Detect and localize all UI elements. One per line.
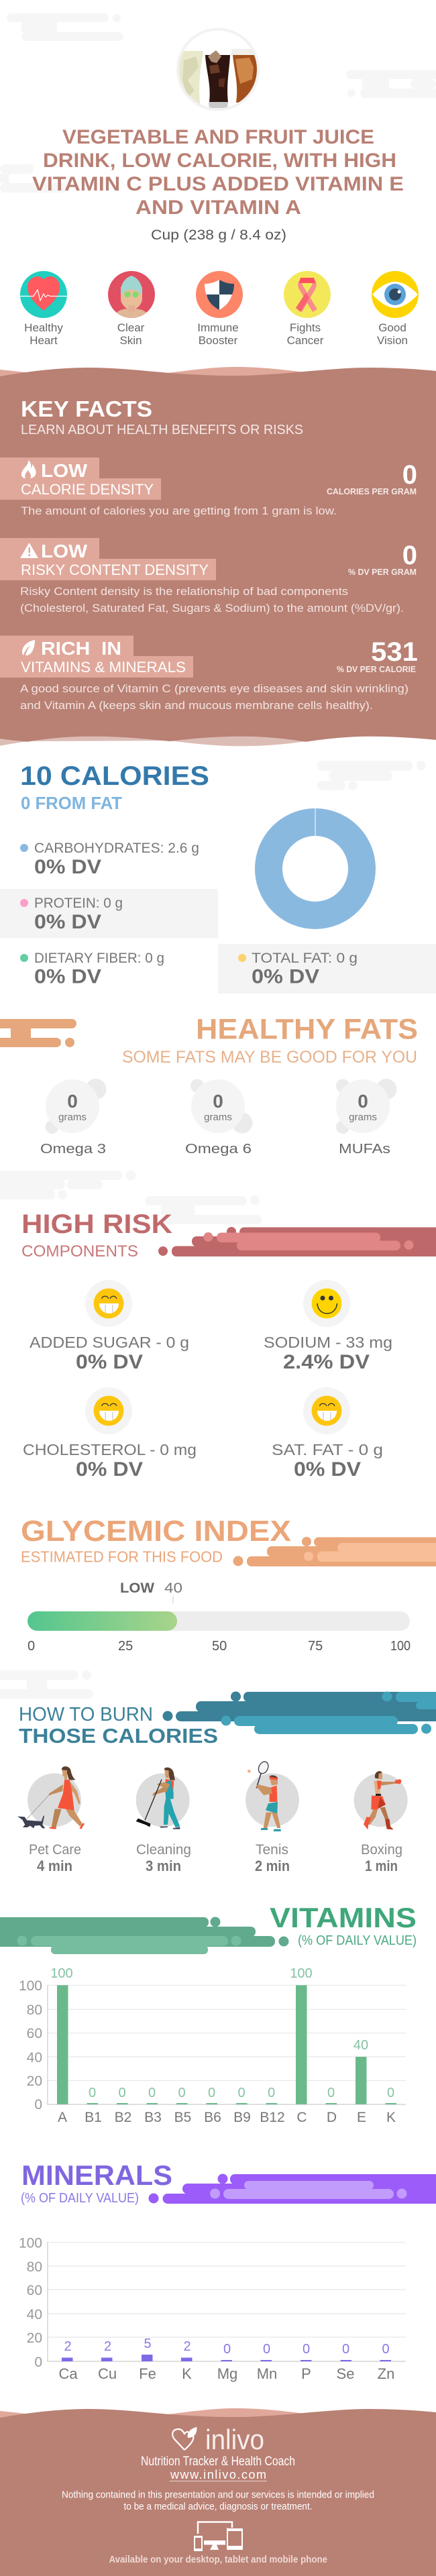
category labels: B9 — [233, 2110, 251, 2125]
website link: www.inlivo.com — [170, 2468, 266, 2481]
label: immune booster: Immune — [197, 321, 239, 334]
y axis labels: 20 — [27, 2330, 42, 2346]
heading: high risk components: HIGH RISK — [21, 1210, 172, 1239]
heading: glycemic index — [21, 1515, 436, 1566]
heading: vitamins: (% OF DAILY VALUE) — [298, 1933, 417, 1948]
icon: flame — [21, 460, 36, 478]
gauge: glycemic index value: 50 — [212, 1639, 227, 1654]
heading: healthy fats — [0, 1013, 418, 1067]
category labels — [58, 2110, 396, 2125]
title: DRINK, LOW CALORIE, WITH HIGH — [43, 150, 396, 172]
y axis labels: 40 — [27, 2050, 42, 2065]
heading: minerals: (% OF DAILY VALUE) — [21, 2191, 139, 2206]
legend item: carbohydrates — [20, 841, 199, 878]
heading: vitamins: VITAMINS — [270, 1902, 417, 1933]
disclaimer: Nothing contained in this presentation and our services is intended or implied — [62, 2489, 374, 2501]
gauge: glycemic index value: 25 — [118, 1639, 133, 1654]
category labels: E — [357, 2110, 366, 2125]
category labels: Cu — [98, 2365, 117, 2382]
value labels: 0 — [89, 2086, 96, 2100]
bar chart: vitamins — [19, 1966, 406, 2125]
label: immune booster: Booster — [199, 334, 238, 347]
gauge: glycemic index value: LOW — [120, 1580, 154, 1596]
panel: omega 6: grams — [204, 1112, 232, 1123]
icon: clear skin — [108, 271, 155, 318]
label: clear skin — [117, 321, 145, 347]
category labels: K — [182, 2365, 192, 2382]
icon: smiling face — [312, 1289, 341, 1318]
y axis labels — [19, 2235, 42, 2370]
icon: grinning face — [312, 1396, 341, 1426]
risk item: saturated fat — [272, 1387, 383, 1481]
value labels: 0 — [263, 2342, 270, 2357]
bar chart: minerals — [19, 2235, 406, 2382]
category labels: Ca — [58, 2365, 78, 2382]
value labels — [50, 1966, 394, 2100]
panel: health benefits — [20, 271, 419, 347]
category labels — [58, 2365, 394, 2382]
y axis labels: 60 — [27, 2026, 42, 2041]
value labels — [64, 2337, 390, 2357]
category labels: B6 — [204, 2110, 221, 2125]
risk item: added sugar — [30, 1280, 189, 1373]
disclaimer: to be a medical advice, diagnosis or treatment. — [123, 2501, 313, 2512]
panel: MUFAs — [336, 1079, 397, 1157]
heading: how to burn those calories: HOW TO BURN — [19, 1704, 153, 1725]
heading: minerals: MINERALS — [21, 2159, 172, 2191]
activity: boxing: 1 min — [365, 1858, 398, 1874]
category labels: B3 — [144, 2110, 162, 2125]
title: AND VITAMIN A — [135, 197, 301, 219]
fact: rich in vitamins and minerals: and Vitamin A (keeps skin and mucous membrane cells healthy). — [20, 699, 373, 712]
value labels: 0 — [178, 2086, 186, 2100]
panel: omega 6: Omega 6 — [185, 1142, 252, 1157]
panel: MUFAs: grams — [349, 1112, 377, 1123]
panel: omega 3: Omega 3 — [40, 1142, 106, 1157]
footer — [0, 2408, 436, 2576]
label: fights cancer: Fights — [290, 321, 321, 334]
fact: rich in vitamins and minerals: RICH IN — [41, 638, 121, 659]
icon: good vision eye — [372, 271, 419, 318]
legend item: protein — [20, 896, 123, 933]
value labels: 0 — [148, 2086, 156, 2100]
value labels: 40 — [353, 2038, 368, 2053]
y axis labels: 0 — [34, 2355, 42, 2370]
legend item: carbohydrates: CARBOHYDRATES: 2.6 g — [34, 841, 199, 856]
legend item: dietary fiber: DIETARY FIBER: 0 g — [34, 951, 164, 966]
panel: omega 3: grams — [58, 1112, 87, 1123]
y axis labels: 40 — [27, 2307, 42, 2322]
label: good vision — [377, 321, 408, 347]
risk item: added sugar: ADDED SUGAR - 0 g — [30, 1334, 189, 1351]
risk item: sodium: 2.4% DV — [283, 1351, 370, 1373]
value labels: 0 — [208, 2086, 215, 2100]
risk item: cholesterol — [23, 1387, 197, 1481]
label: clear skin: Skin — [119, 334, 142, 347]
panel: omega 6 — [185, 1079, 252, 1157]
logo: inlivo: inlivo — [205, 2424, 264, 2455]
fact: low calorie density: LOW — [41, 460, 88, 481]
risk item: cholesterol: 0% DV — [76, 1458, 143, 1481]
value labels: 0 — [237, 2086, 246, 2100]
y axis labels: 100 — [19, 2235, 42, 2251]
heading: key facts: LEARN ABOUT HEALTH BENEFITS OR RISKS — [21, 423, 303, 437]
fact: low calorie density: CALORIES PER GRAM — [327, 486, 417, 496]
tagline: Nutrition Tracker & Health Coach — [141, 2455, 295, 2469]
heading: glycemic index: ESTIMATED FOR THIS FOOD — [21, 1548, 223, 1566]
label: healthy heart — [24, 321, 63, 347]
label: clear skin: Clear — [117, 321, 145, 334]
fact: low risky content density — [0, 538, 417, 614]
category labels: B12 — [260, 2110, 285, 2125]
activity: pet care: 4 min — [37, 1858, 72, 1874]
panel: omega 3 — [40, 1079, 106, 1157]
category labels: C — [296, 2110, 307, 2125]
value labels: 0 — [327, 2086, 335, 2100]
heading: key facts: KEY FACTS — [21, 396, 152, 421]
value labels: 0 — [268, 2086, 275, 2100]
gauge: glycemic index value: 40 — [164, 1580, 182, 1596]
icon: grinning face — [94, 1289, 123, 1318]
value labels: 0 — [342, 2342, 349, 2357]
product photo: three glasses of juice — [176, 30, 258, 110]
label: healthy heart: Heart — [30, 334, 58, 347]
heading: how to burn those calories — [19, 1692, 436, 1748]
value labels: 0 — [382, 2342, 390, 2357]
fact: low calorie density: 0 — [402, 460, 417, 490]
label: good vision: Vision — [377, 334, 408, 347]
y axis labels: 80 — [27, 2002, 42, 2018]
panel: key facts — [0, 367, 436, 746]
value labels: 2 — [64, 2339, 72, 2354]
category labels: Mg — [217, 2365, 237, 2382]
category labels: Mn — [257, 2365, 277, 2382]
panel: MUFAs: MUFAs — [339, 1142, 390, 1157]
logo: inlivo — [172, 2424, 264, 2455]
heading: 10 calories — [20, 761, 209, 813]
legend item: total fat: 0% DV — [252, 966, 319, 987]
heading: high risk components: COMPONENTS — [21, 1242, 138, 1260]
activity: pet care — [17, 1766, 85, 1874]
legend item: protein: 0% DV — [34, 911, 101, 933]
value labels: 0 — [118, 2086, 126, 2100]
panel: omega 6: 0 — [213, 1091, 223, 1112]
illustration: tennis player — [246, 1760, 299, 1831]
label: fights cancer: Cancer — [287, 334, 324, 347]
icon: healthy heart — [20, 271, 67, 318]
fact: low risky content density: 0 — [402, 541, 417, 570]
category labels: A — [58, 2110, 67, 2125]
heading: how to burn those calories: THOSE CALORIES — [19, 1724, 218, 1748]
gauge: glycemic index value: 100 — [390, 1639, 411, 1654]
activity: tennis: Tenis — [256, 1842, 288, 1858]
legend item: protein: PROTEIN: 0 g — [34, 896, 123, 911]
activity: cleaning: 3 min — [146, 1858, 181, 1874]
risk item: sodium — [264, 1280, 392, 1373]
serving size: Cup (238 g / 8.4 oz) — [151, 227, 286, 243]
fact: low calorie density — [0, 458, 417, 517]
label: immune booster — [197, 321, 239, 347]
risk item: added sugar: 0% DV — [76, 1351, 143, 1373]
title: VITAMIN C PLUS ADDED VITAMIN E — [32, 173, 404, 195]
icon: immune booster — [196, 271, 243, 318]
y axis labels: 60 — [27, 2283, 42, 2298]
category labels: K — [386, 2110, 396, 2125]
legend item: total fat — [238, 951, 358, 987]
y axis labels: 100 — [19, 1978, 42, 1994]
risk item: sodium: SODIUM - 33 mg — [264, 1334, 392, 1351]
legend item: dietary fiber — [20, 951, 164, 987]
fact: rich in vitamins and minerals — [0, 636, 418, 712]
activity: cleaning — [136, 1768, 191, 1874]
heading: minerals — [21, 2159, 436, 2206]
icon: leaf — [22, 640, 35, 655]
legend item: dietary fiber: 0% DV — [34, 966, 101, 987]
heading: high risk components — [21, 1210, 436, 1260]
fact: low calorie density: The amount of calories you are getting from 1 gram is low. — [21, 504, 337, 517]
risk item: saturated fat: 0% DV — [294, 1458, 361, 1481]
value labels: 0 — [387, 2086, 394, 2100]
activity: tennis — [246, 1760, 299, 1874]
title: VEGETABLE AND FRUIT JUICE — [62, 126, 374, 148]
fact: low calorie density: CALORIE DENSITY — [21, 481, 154, 498]
disclaimer — [62, 2489, 374, 2512]
icon: grinning face — [94, 1396, 123, 1426]
icon: desktop, tablet and phone — [194, 2522, 243, 2551]
gauge: glycemic index value: 75 — [308, 1639, 323, 1654]
fact: rich in vitamins and minerals: VITAMINS & MINERALS — [21, 659, 186, 676]
risk item: saturated fat: SAT. FAT - 0 g — [272, 1441, 383, 1458]
legend: macronutrients — [0, 841, 436, 994]
activity: tennis: 2 min — [255, 1858, 290, 1874]
activity: boxing — [354, 1771, 408, 1874]
bars — [62, 2355, 391, 2361]
gauge: glycemic index value — [28, 1580, 411, 1654]
heading: healthy fats: SOME FATS MAY BE GOOD FOR YOU — [122, 1048, 417, 1067]
fact: rich in vitamins and minerals: A good source of Vitamin C (prevents eye diseases and skin wrinkling) — [20, 682, 408, 695]
fact: rich in vitamins and minerals: % DV PER CALORIE — [337, 664, 416, 674]
icon: fights cancer ribbon — [284, 271, 331, 318]
heading: 10 calories: 10 CALORIES — [20, 761, 209, 791]
gauge: glycemic index value: 0 — [28, 1639, 35, 1654]
heading: vitamins — [0, 1902, 417, 1954]
y axis labels: 0 — [34, 2097, 42, 2112]
category labels: Fe — [139, 2365, 156, 2382]
category labels: P — [301, 2365, 311, 2382]
category labels: D — [327, 2110, 337, 2125]
legend item: total fat: TOTAL FAT: 0 g — [252, 951, 358, 966]
y axis labels — [19, 1978, 42, 2112]
label: fights cancer — [287, 321, 324, 347]
label: good vision: Good — [378, 321, 406, 334]
heading: 10 calories: 0 FROM FAT — [21, 793, 122, 813]
fact: low risky content density: Risky Content density is the relationship of bad components — [20, 585, 348, 598]
bars — [57, 1985, 396, 2104]
category labels: B2 — [115, 2110, 131, 2125]
y axis labels: 20 — [27, 2074, 42, 2089]
panel: omega 3: 0 — [67, 1091, 78, 1112]
illustration: boxer — [354, 1771, 408, 1829]
illustration: woman walking dog — [17, 1766, 85, 1829]
value labels: 2 — [183, 2339, 191, 2354]
label: healthy heart: Healthy — [24, 321, 63, 334]
heading: healthy fats: HEALTHY FATS — [196, 1013, 418, 1045]
risk item: cholesterol: CHOLESTEROL - 0 mg — [23, 1441, 197, 1458]
fact: low risky content density: LOW — [41, 541, 88, 561]
y axis labels: 80 — [27, 2259, 42, 2275]
illustration: woman sweeping — [136, 1768, 190, 1829]
value labels: 0 — [223, 2342, 231, 2357]
value labels: 0 — [303, 2342, 310, 2357]
activity: cleaning: Cleaning — [136, 1842, 191, 1858]
category labels: B1 — [85, 2110, 102, 2125]
fact: low risky content density: RISKY CONTENT DENSITY — [21, 561, 209, 578]
heading: glycemic index: GLYCEMIC INDEX — [21, 1515, 291, 1548]
donut chart: calorie sources — [268, 808, 362, 915]
availability note: Available on your desktop, tablet and mobile phone — [109, 2554, 327, 2565]
activity: pet care: Pet Care — [29, 1842, 81, 1858]
panel: MUFAs: 0 — [358, 1091, 368, 1112]
activity: boxing: Boxing — [361, 1842, 402, 1858]
fact: rich in vitamins and minerals: 531 — [371, 637, 418, 667]
value labels: 5 — [144, 2337, 152, 2351]
legend item: carbohydrates: 0% DV — [34, 856, 101, 878]
fact: low risky content density: (Cholesterol, Saturated Fat, Sugars & Sodium) to the amount (%DV/gr). — [20, 602, 404, 614]
icon: warning triangle — [20, 543, 38, 558]
category labels: Zn — [378, 2365, 394, 2382]
heading: key facts — [21, 396, 303, 437]
value labels: 100 — [290, 1966, 313, 1981]
category labels: Se — [337, 2365, 354, 2382]
fact: low risky content density: % DV PER GRAM — [348, 567, 417, 577]
title — [32, 126, 404, 219]
value labels: 100 — [50, 1966, 73, 1981]
value labels: 2 — [104, 2339, 111, 2354]
category labels: B5 — [174, 2110, 191, 2125]
